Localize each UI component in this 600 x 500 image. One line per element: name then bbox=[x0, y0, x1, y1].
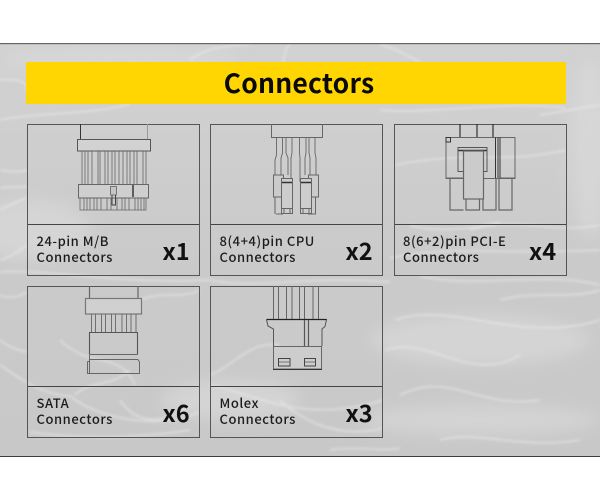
label: SATA bbox=[36, 393, 69, 412]
title banner: Connectors bbox=[224, 62, 374, 101]
icon: SATA connector bbox=[84, 286, 142, 374]
label bbox=[36, 393, 113, 428]
icon: PCI-E connector bbox=[446, 124, 516, 211]
label: Connectors bbox=[36, 247, 113, 266]
count: x4 bbox=[529, 233, 556, 267]
label: Connectors bbox=[220, 247, 296, 266]
label bbox=[220, 231, 315, 266]
panel: 8(6+2)pin PCI-E connector bbox=[394, 124, 566, 276]
count: x3 bbox=[346, 395, 373, 429]
label: Connectors bbox=[36, 409, 113, 428]
count: x2 bbox=[346, 233, 373, 267]
icon: 24-pin connector bbox=[77, 124, 151, 210]
label bbox=[36, 231, 113, 266]
icon: CPU connector bbox=[271, 124, 323, 214]
panel: 24-pin M/B connector bbox=[27, 124, 200, 276]
label: 8(4+4)pin CPU bbox=[220, 231, 315, 250]
label: Molex bbox=[220, 393, 259, 412]
title banner bbox=[26, 62, 566, 104]
count: x6 bbox=[162, 395, 190, 429]
label: 8(6+2)pin PCI-E bbox=[403, 231, 506, 250]
count: x1 bbox=[162, 233, 190, 267]
label: Connectors bbox=[403, 247, 479, 266]
icon: Molex connector bbox=[266, 286, 328, 370]
panel: 8(4+4)pin CPU connector bbox=[210, 124, 383, 276]
panel: Molex connector bbox=[210, 286, 383, 438]
label: 24-pin M/B bbox=[36, 231, 109, 250]
label bbox=[220, 393, 296, 428]
panel: SATA connector bbox=[27, 286, 200, 438]
label: Connectors bbox=[220, 409, 296, 428]
label bbox=[403, 231, 506, 266]
